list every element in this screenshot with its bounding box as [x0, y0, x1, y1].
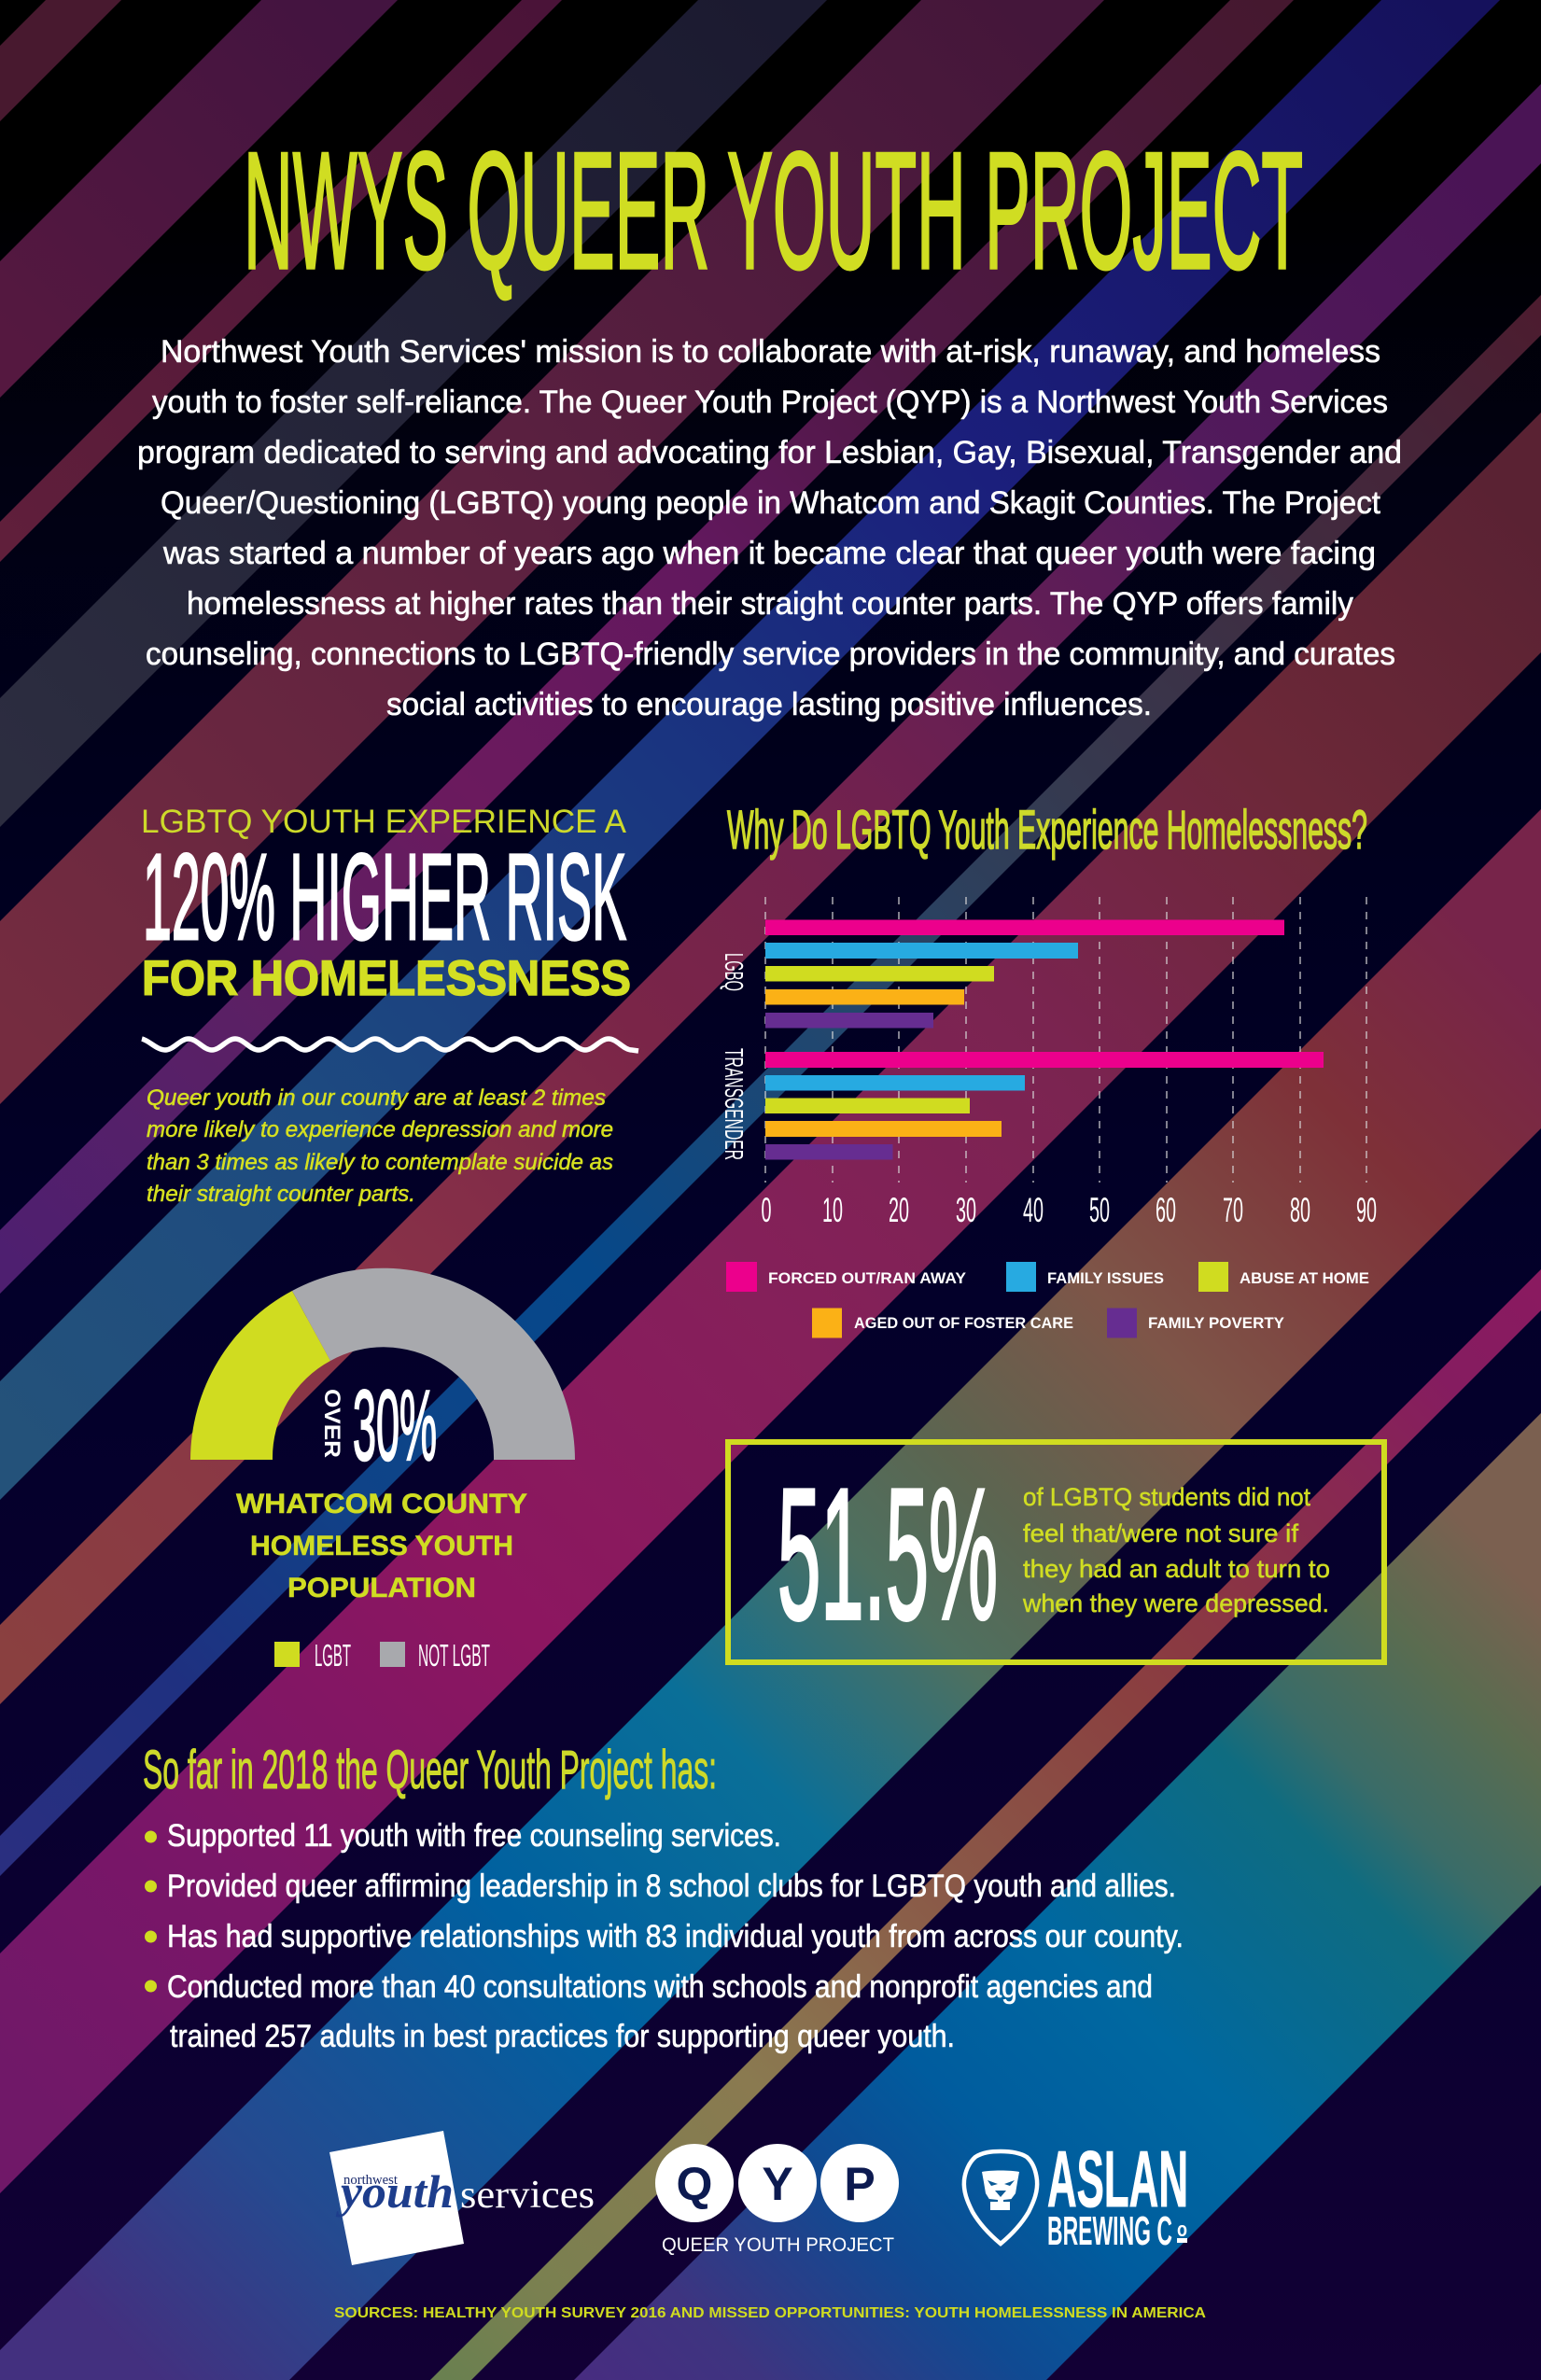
gauge: LGBT segment	[190, 1291, 330, 1460]
subheading: for homelessness: FOR HOMELESSNESS	[142, 951, 631, 1006]
intro paragraph: youth to foster self-reliance. The Queer Youth Project (QYP) is a Northwest Youth Services	[152, 385, 1388, 420]
sources: SOURCES: HEALTHY YOUTH SURVEY 2016 AND MISSED OPPORTUNITIES: YOUTH HOMELESSNESS IN AMERICA	[334, 2305, 1206, 2321]
logo: northwest youth services	[329, 2131, 595, 2265]
bullet list: Supported 11 youth with free counseling services.	[167, 1818, 781, 1854]
logo: Aslan Brewing Co	[964, 2135, 1188, 2254]
logo: northwest youth services: youth	[336, 2165, 454, 2218]
heading: LGBTQ youth experience a: LGBTQ YOUTH EXPERIENCE A	[141, 804, 627, 840]
panel: gauge chart	[190, 1268, 575, 1673]
italic text block: than 3 times as likely to contemplate suicide as	[147, 1150, 613, 1175]
bullet list: Provided queer affirming leadership in 8 school clubs for LGBTQ youth and allies.	[167, 1869, 1176, 1904]
x axis numbers: 80	[1290, 1191, 1310, 1229]
intro paragraph: social activities to encourage lasting positive influences.	[386, 687, 1152, 722]
x axis numbers: 50	[1089, 1191, 1110, 1229]
x axis numbers: 40	[1023, 1191, 1044, 1229]
x axis numbers: 70	[1223, 1191, 1243, 1229]
panel: gauge chart: NOT LGBT	[418, 1638, 490, 1673]
intro paragraph: was started a number of years ago when it became clear that queer youth were facing	[162, 536, 1376, 571]
x axis numbers: 90	[1356, 1191, 1377, 1229]
panel: bar chart section	[720, 800, 1377, 1338]
gauge caption: WHATCOM COUNTY	[236, 1489, 527, 1519]
intro paragraph	[137, 334, 1402, 722]
chart legend: AGED OUT OF FOSTER CARE	[854, 1314, 1073, 1332]
intro paragraph: counseling, connections to LGBTQ-friendly service providers in the community, and curates	[146, 637, 1395, 672]
panel: gauge chart: 30%	[353, 1369, 437, 1481]
bullet list	[145, 1818, 1184, 2054]
logo: QYP	[655, 2144, 899, 2256]
gauge caption	[236, 1489, 527, 1603]
list heading: So far in 2018 the Queer Youth Project has:	[143, 1740, 717, 1800]
axis label: transgender: TRANSGENDER	[720, 1048, 749, 1160]
wavy divider	[142, 1039, 638, 1051]
callout text	[1022, 1483, 1330, 1617]
callout text: they had an adult to turn to	[1023, 1555, 1330, 1583]
logo: QYP: Q	[677, 2158, 712, 2210]
icon: lion head	[964, 2151, 1037, 2244]
callout: 51.5% stat box: 51.5%	[778, 1450, 998, 1659]
callout text: feel that/were not sure if	[1023, 1519, 1299, 1547]
bar chart	[720, 897, 1377, 1229]
stat: over: OVER	[319, 1389, 344, 1458]
logo: northwest youth services: northwest	[343, 2173, 399, 2188]
italic text block	[147, 1085, 613, 1207]
intro paragraph: Northwest Youth Services' mission is to collaborate with at-risk, runaway, and homeless	[161, 334, 1380, 370]
gauge caption: HOMELESS YOUTH	[250, 1531, 513, 1561]
x axis numbers: 0	[762, 1191, 771, 1229]
logo: QYP: QUEER YOUTH PROJECT	[662, 2234, 894, 2256]
gauge: not LGBT segment	[292, 1268, 575, 1460]
bullet list: Conducted more than 40 consultations with schools and nonprofit agencies and	[167, 1969, 1153, 2005]
chart legend: ABUSE AT HOME	[1240, 1269, 1369, 1287]
x axis numbers: 20	[889, 1191, 909, 1229]
callout text: when they were depressed.	[1022, 1589, 1329, 1617]
logo: QYP: P	[844, 2158, 876, 2210]
italic text block: Queer youth in our county are at least 2 times	[147, 1085, 606, 1111]
x axis numbers: 60	[1156, 1191, 1176, 1229]
panel: achievements list	[143, 1740, 1184, 2054]
callout text: of LGBTQ students did not	[1023, 1483, 1310, 1511]
intro paragraph: program dedicated to serving and advocating for Lesbian, Gay, Bisexual, Transgender and	[137, 435, 1402, 470]
logo: QYP: Y	[762, 2158, 793, 2210]
chart legend: FORCED OUT/RAN AWAY	[768, 1269, 967, 1287]
logo: northwest youth services: services	[460, 2174, 595, 2217]
gauge caption: POPULATION	[287, 1573, 476, 1603]
bullet list: Has had supportive relationships with 83 individual youth from across our county.	[167, 1919, 1184, 1954]
chart legend	[726, 1262, 1369, 1338]
bullet list: trained 257 adults in best practices for supporting queer youth.	[170, 2019, 955, 2054]
gauge legend: LGBT	[315, 1638, 351, 1673]
x axis numbers: 10	[822, 1191, 843, 1229]
text: 120% HIGHER RISK	[143, 828, 626, 965]
italic text block: more likely to experience depression and more	[147, 1117, 613, 1142]
gauge legend	[274, 1638, 490, 1673]
chart legend: FAMILY ISSUES	[1047, 1269, 1164, 1287]
panel: 120% higher risk	[141, 804, 638, 1207]
logo: Aslan Brewing Co: o	[1177, 2218, 1187, 2241]
intro paragraph: homelessness at higher rates than their straight counter parts. The QYP offers family	[187, 586, 1353, 622]
intro paragraph: Queer/Questioning (LGBTQ) young people in Whatcom and Skagit Counties. The Project	[161, 485, 1381, 521]
chart legend: FAMILY POVERTY	[1148, 1314, 1285, 1332]
logo: Aslan Brewing Co: ASLAN	[1047, 2135, 1188, 2224]
bars: LGBQ	[765, 920, 1284, 1029]
x axis numbers: 30	[956, 1191, 976, 1229]
axis label: LGBQ: LGBQ	[720, 953, 749, 991]
italic text block: their straight counter parts.	[147, 1182, 415, 1207]
bars: transgender	[765, 1052, 1324, 1159]
x axis numbers	[762, 1191, 1377, 1229]
logo: Aslan Brewing Co: BREWING C	[1047, 2208, 1172, 2254]
